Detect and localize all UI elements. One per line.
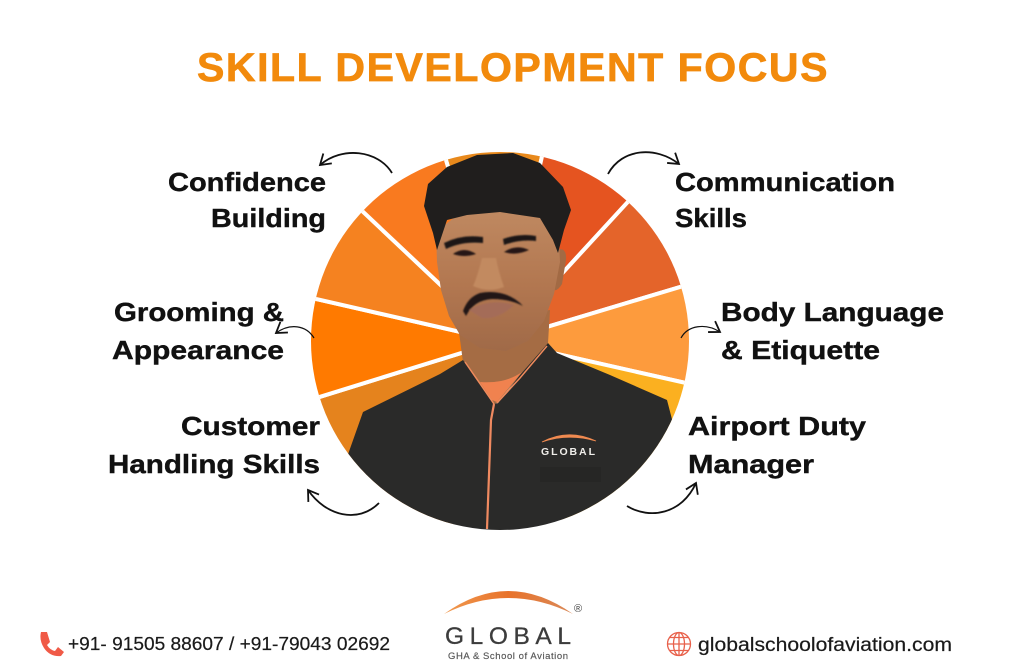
jacket [340, 343, 674, 540]
label: airport duty manager [688, 411, 867, 479]
pocket [540, 467, 601, 482]
shirt [480, 372, 522, 402]
icon: globe [668, 632, 690, 656]
label: airport duty manager: Manager [688, 449, 814, 479]
logo tagline: GHA & School of Aviation [448, 651, 568, 662]
website: globalschoolofaviation.com [698, 635, 952, 656]
zip [487, 404, 494, 529]
label: communication skills [675, 167, 895, 233]
moustache [463, 292, 523, 316]
portrait [340, 153, 674, 540]
face [436, 212, 560, 334]
icon: phone [40, 632, 64, 656]
neck [458, 310, 550, 405]
arrow: grooming [276, 327, 314, 338]
title: SKILL DEVELOPMENT FOCUS [197, 46, 829, 90]
arrow: confidence [320, 153, 392, 173]
arrow: airport duty [627, 483, 696, 513]
arrow: communication [608, 152, 679, 174]
pie wheel with portrait [311, 152, 689, 530]
nose shading [473, 258, 504, 290]
logo arc [444, 591, 573, 614]
label: customer handling skills [108, 411, 320, 479]
arrow: body language [681, 326, 720, 338]
label: communication skills: Communication [675, 167, 895, 197]
label: grooming and appearance: Appearance [112, 335, 284, 365]
badge arc [542, 435, 596, 442]
label: body language and etiquette: & Etiquette [721, 335, 880, 365]
logo wordmark: GLOBAL [445, 623, 571, 650]
label: communication skills: Skills [675, 203, 747, 233]
label: customer handling skills: Handling Skills [108, 449, 320, 479]
label: airport duty manager: Airport Duty [688, 411, 867, 441]
logo [444, 591, 582, 662]
label: customer handling skills: Customer [181, 411, 320, 441]
badge text: GLOBAL [541, 446, 596, 458]
label: body language and etiquette [721, 297, 944, 365]
registered mark: ® [574, 603, 582, 615]
label: grooming and appearance: Grooming & [114, 297, 284, 327]
collar piping [465, 346, 547, 404]
face features [444, 235, 536, 318]
eyebrows [444, 235, 536, 249]
eyes [453, 247, 529, 256]
phone numbers: +91- 91505 88607 / +91-79043 02692 [68, 634, 390, 654]
pie wedges [311, 152, 689, 524]
label: confidence building: Building [211, 203, 326, 233]
ear [554, 249, 566, 290]
label: confidence building [168, 167, 326, 233]
hair [424, 153, 571, 253]
label: grooming and appearance [112, 297, 284, 365]
lips [469, 302, 514, 318]
label: confidence building: Confidence [168, 167, 326, 197]
label: body language and etiquette: Body Language [721, 297, 944, 327]
arrow: customer handling [308, 490, 379, 515]
